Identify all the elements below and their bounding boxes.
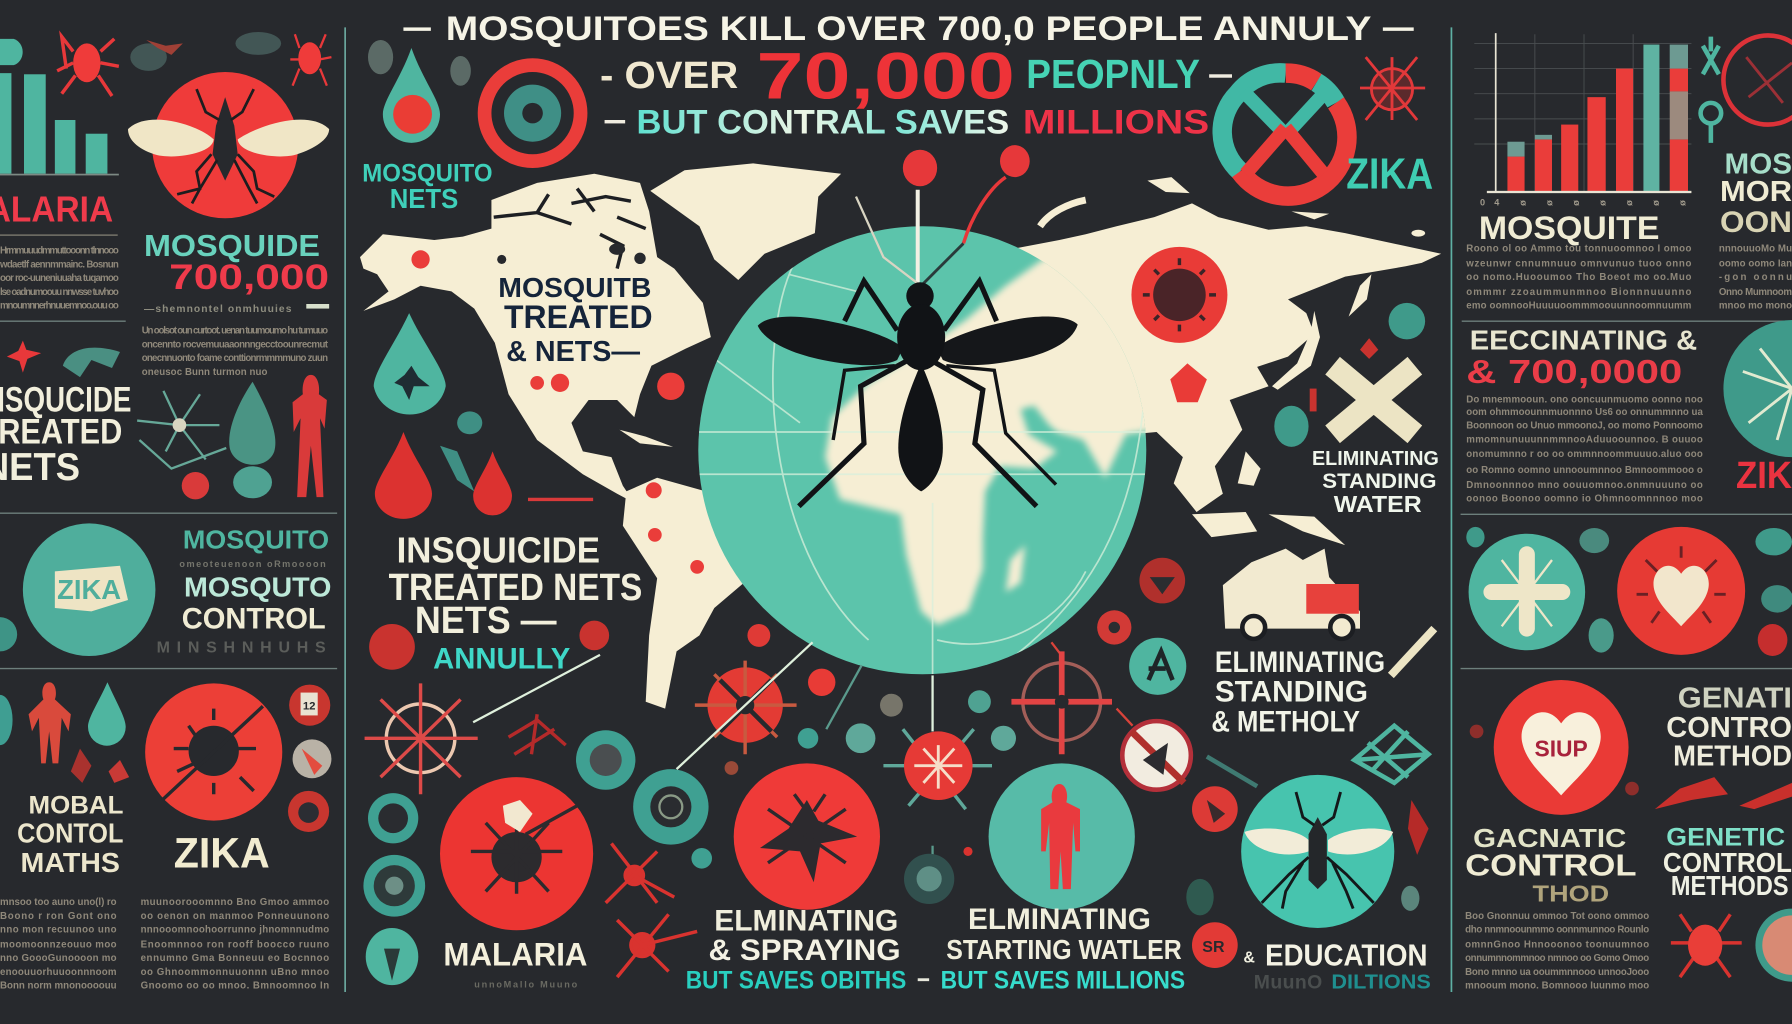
icon: red target bbox=[1011, 651, 1112, 754]
body text: mosquite: Onno Mumnoom bbox=[1719, 287, 1792, 298]
map: south america bbox=[623, 478, 773, 709]
icon: red and teal ring target bbox=[485, 65, 581, 161]
map: arctic cracks bbox=[494, 189, 646, 269]
icon: teal drop with red blob bbox=[383, 48, 440, 143]
text: genatic control method bbox=[1666, 682, 1792, 773]
icon: red wheel bbox=[365, 683, 478, 794]
icon: spoked star bbox=[137, 391, 226, 469]
body text: mosquite: oo nomo.Huooumoo Tho Boeot mo oo.Muo bbox=[1466, 272, 1691, 283]
title line 3: MILLIONS bbox=[1023, 104, 1209, 142]
icon: red squiggle bbox=[509, 714, 566, 754]
body text: malaria: mnoumnnerhnuuemnoo.ouu oo bbox=[0, 301, 119, 312]
icon: cut teal ring bbox=[0, 617, 17, 651]
icon: red circle with cracked heart bbox=[1617, 527, 1745, 655]
title line 2 bbox=[600, 39, 1232, 113]
text: gacnatic control thod: GACNATIC bbox=[1473, 823, 1626, 853]
body text: eliminating: Do mnemmooun. ono ooncuunmuomo oonno noo bbox=[1466, 394, 1703, 405]
connector lines bbox=[677, 642, 1133, 897]
icon: crossed virus bbox=[1360, 57, 1425, 120]
body text: mosquide: Un oolsot oun curtoot. uenan tuumoumo hu tumuuo bbox=[142, 326, 328, 337]
heading: mosquide 700,000: MOSQUIDE bbox=[144, 228, 320, 263]
text: eliminating standing & metholy: & METHOLY bbox=[1211, 705, 1360, 738]
small grey icons bbox=[368, 40, 471, 86]
icon: crossed cream circle bbox=[1122, 721, 1191, 790]
text: mosquito control: MINSHNHUHS bbox=[157, 640, 326, 657]
icon: teal circle with plus bbox=[1469, 534, 1585, 650]
text: zika: ZIKA bbox=[174, 829, 270, 876]
text: eliminating standing water: STANDING bbox=[1322, 468, 1437, 493]
body text: mosquite: -gon oonnu bbox=[1719, 272, 1792, 283]
body text: malaria: wdaetlf aennmmainc. Bosnun bbox=[0, 259, 119, 270]
text: education: DILTIONS bbox=[1331, 971, 1431, 994]
text: insquicide treated nets bbox=[389, 529, 642, 676]
text: bottom captions bbox=[686, 903, 1185, 995]
network icons under globe bbox=[606, 558, 1191, 977]
icon: red dumbbell bbox=[528, 498, 593, 501]
text: bottom captions: ELMINATING bbox=[714, 904, 898, 937]
icon: red bug right bbox=[290, 34, 331, 86]
text: mobal control maths: CONTOL bbox=[17, 817, 123, 848]
icon: teal sprig bbox=[440, 411, 482, 491]
icon: red circle with mosquito bbox=[128, 72, 329, 218]
icon: big teal circle with person bbox=[989, 763, 1135, 910]
body text: gacnatic: onnumnnommnoo nmnoo oo Gomo Omoo bbox=[1465, 953, 1649, 964]
text: mosquito nets: MOSQUITO bbox=[362, 160, 493, 188]
text: eliminating standing & metholy: STANDING bbox=[1215, 676, 1368, 709]
icon: red drops bbox=[375, 432, 512, 519]
body text: mosquite: oomo oomo Ian bbox=[1719, 258, 1792, 269]
map: eurasia bbox=[1011, 203, 1441, 512]
heading: mosquide 700,000: —shemnontel onmhuuies bbox=[144, 304, 292, 315]
icon: teal ring cut bbox=[1755, 909, 1792, 982]
body text: bottom left: mnsoo too auno uno(l) ro bbox=[0, 897, 117, 908]
heading: eliminating 700,000 bbox=[1466, 325, 1697, 391]
small dots bbox=[691, 624, 1016, 869]
body text: bottom left: Bonn norm mnonoooouu bbox=[0, 981, 117, 992]
body text: bottom left: Gnoomo oo oo mnoo. Bmnoomnoo In bbox=[141, 981, 329, 992]
body text: eliminating: mmomnunuuunnmmnooAduuoounnoo. B ouuoo bbox=[1466, 434, 1703, 445]
text: gacnatic control thod: CONTROL bbox=[1465, 847, 1637, 882]
globe bbox=[698, 226, 1146, 674]
icon: red crossed circle bbox=[1723, 35, 1792, 125]
small disease icons bbox=[288, 685, 331, 832]
heading: mosquide 700,000: 700,000 bbox=[169, 257, 329, 297]
map: northern islands bbox=[1040, 177, 1425, 237]
icon: teal circle with zika mark: ZIKA bbox=[57, 574, 121, 605]
body text: gacnatic: mnooum mono. Bomnooo Iuunmo moo bbox=[1465, 981, 1649, 992]
text: genetic control methods bbox=[1663, 824, 1792, 901]
panel: left column bbox=[0, 27, 345, 992]
icon: red side circles bbox=[1192, 786, 1238, 968]
title line 2: PEOPNLY bbox=[1026, 51, 1200, 97]
text: bottom captions: ELMINATING bbox=[968, 903, 1151, 936]
teal rings column bbox=[363, 730, 635, 985]
icon: red circle with heart bbox=[1494, 680, 1629, 815]
title bbox=[403, 10, 1414, 142]
body text: eliminating: Boonnoon oo Unuo mmoonoJ, oo momo Ponnoomo bbox=[1466, 421, 1703, 432]
icon: teal circle with glyph bbox=[1129, 638, 1186, 695]
icon: red bug left bbox=[57, 37, 119, 96]
text: bottom captions: STARTING WATLER bbox=[946, 934, 1182, 965]
text: genetic control methods: GENETIC bbox=[1666, 824, 1785, 852]
bar chart bbox=[1474, 33, 1691, 208]
icon: red bug bottom bbox=[1671, 914, 1742, 977]
text: genatic control method: CONTRO bbox=[1666, 712, 1792, 744]
text: mobal control maths: MOBAL bbox=[29, 792, 123, 820]
bar chart: teal bars bbox=[0, 39, 119, 175]
body text: bottom left: Boono r ron Gont ono bbox=[0, 911, 117, 922]
text: mosquito control: omeoteuenoon oRmoooon bbox=[179, 559, 326, 569]
icon: red star bbox=[7, 341, 41, 373]
icon: teal bar and dim marks bbox=[1207, 757, 1257, 786]
icon: red blobs bbox=[369, 621, 609, 670]
text: mosquite: MOSQUITE bbox=[1479, 210, 1659, 246]
body text: eliminating: onomumnno r oo oo ommnnoommuuuo.aluo ooo bbox=[1466, 449, 1703, 460]
body text: bottom left: Enoomnnoo ron rooff boocco ruuno bbox=[141, 939, 329, 950]
icon: teal ring bbox=[633, 769, 709, 845]
body text: mosquide: onecnnuonto foame conttionrmmmmuno zuun bbox=[142, 353, 328, 364]
icons: right side scraps bbox=[1186, 800, 1429, 915]
icon: red figure bbox=[293, 375, 327, 497]
body text: eliminating: oo Romno oomno unnooumnnoo Bmnoommooo o bbox=[1466, 465, 1703, 476]
map: red hotspots bbox=[411, 250, 704, 574]
icon: big teal circle with mosquito bbox=[1241, 775, 1394, 928]
map: japan and kamchatka bbox=[1192, 274, 1371, 545]
title line 3 bbox=[605, 104, 1209, 142]
text: bottom captions: BUT SAVES MILLIONS bbox=[941, 967, 1185, 995]
text: mosquito control cut: OON bbox=[1720, 206, 1792, 239]
icon: red person and teal drop bbox=[0, 682, 129, 783]
icon: red crossed wheel bbox=[695, 661, 797, 754]
heading: mosquide 700,000 bbox=[144, 228, 329, 315]
text: bottom captions: & SPRAYING bbox=[709, 934, 901, 967]
arrow line bbox=[473, 655, 600, 722]
body text: gacnatic: omnnGnoo Hnnooonoo toonuumnoo bbox=[1465, 939, 1649, 950]
icon: red flower bbox=[182, 472, 209, 499]
antennae bbox=[856, 177, 1006, 286]
text: insquicide treated nets: ANNULLY bbox=[433, 643, 570, 676]
body text: bottom left: nnnooomnoohoorrunno jhnomnnudmo bbox=[141, 925, 329, 936]
panel: right column bbox=[1451, 27, 1792, 992]
map: asia virus marker bbox=[1131, 247, 1227, 402]
icon: dim specks bbox=[1470, 725, 1639, 795]
title line 1: MOSQUITOES KILL OVER 700,0 PEOPLE ANNULY bbox=[446, 10, 1372, 48]
text: malaria cream: MALARIA bbox=[443, 937, 587, 973]
text: eliminating standing water bbox=[1312, 447, 1439, 517]
divider lines bbox=[1451, 27, 1792, 992]
body text: malaria bbox=[0, 234, 119, 312]
icon: big red circle with virus bbox=[440, 777, 593, 930]
text: gacnatic control thod bbox=[1465, 823, 1637, 907]
text: mosquito control cut: MOR bbox=[1720, 176, 1792, 208]
map: greenland bbox=[650, 163, 841, 280]
text: bottom captions: BUT SAVES OBITHS bbox=[686, 967, 906, 995]
body text: eliminating: Dmnoonnnoo mno oouuomnoo.onmnuuuno oo bbox=[1466, 480, 1703, 491]
body text: gacnatic bbox=[1465, 911, 1649, 992]
text: eliminating standing water: WATER bbox=[1334, 491, 1422, 517]
text: treated nets bbox=[0, 379, 131, 489]
icon: red circle with heart: SIUP bbox=[1534, 736, 1588, 762]
text: mobal control maths bbox=[17, 792, 123, 878]
icon: teal circle with zika mark bbox=[23, 523, 155, 656]
text: genatic control method: GENATI bbox=[1678, 682, 1792, 714]
text: treated nets on map: MOSQUITB bbox=[498, 272, 651, 303]
body text: mosquite: ommmr zzoaummunmnoo Bionnnuuunno bbox=[1466, 287, 1691, 298]
icon: teal drop with splat bbox=[374, 313, 446, 415]
body text: mosquite: nnnouuoMo Mu bbox=[1719, 243, 1792, 254]
text: mosquito control bbox=[157, 525, 331, 657]
body text: bottom left: oo oenon on manmoo Ponneuunono bbox=[141, 911, 329, 922]
body text: mosquite: Roono ol oo Ammo tou tonnuoomnoo I omoo bbox=[1466, 243, 1691, 254]
body text: mosquide: oneusoc Bunn turmon nuo bbox=[142, 367, 267, 378]
text: mosquito nets: NETS bbox=[390, 183, 458, 214]
globe: grid lines bbox=[699, 267, 1146, 674]
text: education: EDUCATION bbox=[1265, 938, 1427, 973]
body text: malaria: Hrmmuuudmmuttooonn tlnnooo bbox=[0, 246, 119, 257]
body text: bottom left: ennumno Gma Bonneuu eo Bocnnoo bbox=[141, 953, 329, 964]
body bbox=[897, 282, 945, 491]
icon: teal lattice bbox=[1354, 726, 1429, 783]
body text: bottom left: nno GoooGunoooon mo bbox=[0, 953, 117, 964]
body text: bottom left: moomoonnzeouuo moo bbox=[0, 939, 117, 950]
text: mosquito control cut: MOS bbox=[1725, 149, 1792, 181]
body text: mosquide: oncennto rocvemuuaaonnngecctoounrecmut bbox=[142, 339, 329, 350]
icon: teal ribbons bbox=[1701, 37, 1721, 143]
body text: bottom left: oo Ghnoommonnuuonnn uBno mnoo bbox=[141, 967, 329, 978]
title line 2: 70,000 bbox=[757, 39, 1015, 113]
icon: red star circle bbox=[883, 729, 992, 809]
antenna balls bbox=[903, 145, 1030, 186]
body text: malaria: oor roc-uuneniuuaha tuqamoo bbox=[0, 273, 119, 284]
icon: speckled scrap bbox=[130, 32, 281, 71]
icon: teal droplet leaf bbox=[229, 382, 275, 465]
icon: big cream x bbox=[1333, 366, 1415, 434]
text: mosquito control cut bbox=[1720, 149, 1792, 239]
caption under malaria: unnoMallo Muuno bbox=[474, 979, 578, 989]
icon: red streaks bbox=[1655, 777, 1792, 809]
wings bbox=[758, 317, 1078, 365]
body text: eliminating bbox=[1466, 394, 1703, 505]
icon: teal and red x ring bbox=[1222, 73, 1347, 196]
body text: bottom left: nno mon recuunoo uno bbox=[0, 925, 117, 936]
icon: red virus circle bbox=[145, 683, 282, 821]
text: insquicide treated nets: NETS — bbox=[415, 599, 557, 641]
text: treated nets on map: & NETS— bbox=[506, 336, 640, 368]
body text: bottom left: muunoorooomnno Bno Gmoo ammoo bbox=[141, 897, 329, 908]
bar chart: 04 ᴓ ᴓ ᴓ ᴓ ᴓ ᴓ ᴓ bbox=[1480, 198, 1686, 208]
text: zika teal: ZIKA bbox=[1346, 151, 1433, 199]
body text: mosquite: mnoo mo mono bbox=[1719, 301, 1792, 312]
text: education bbox=[1243, 938, 1431, 994]
icon: big red circle with bug bbox=[734, 763, 880, 910]
body text: eliminating: oonoo Boonoo oomno io Ohmnoomnnnoo moo bbox=[1466, 494, 1703, 505]
text: mosquito control: CONTROL bbox=[182, 603, 326, 636]
body text: gacnatic: Bono mnno ua ooummnnooo unnooJooo bbox=[1465, 967, 1649, 978]
text: mosquito nets bbox=[362, 160, 493, 214]
icons: teal leaves and red marks bbox=[1274, 303, 1425, 447]
title line 3: BUT CONTRAL SAVES bbox=[637, 104, 1009, 142]
text: insquicide treated nets: TREATED NETS bbox=[389, 566, 642, 608]
legs bbox=[799, 281, 1056, 506]
text: insquicide treated nets: INSQUICIDE bbox=[397, 529, 600, 570]
text: education: & bbox=[1243, 949, 1255, 966]
icon: australia truck bbox=[1223, 549, 1360, 639]
icon: red splats bbox=[606, 843, 697, 977]
body text: gacnatic: Boo Gnonnuu ommoo Tot oono ommoo bbox=[1465, 911, 1649, 922]
text: mosquito control: MOSQUITO bbox=[183, 525, 329, 555]
text: mobal control maths: MATHS bbox=[21, 847, 120, 878]
divider lines bbox=[0, 27, 345, 992]
icon: dim teal ring bbox=[904, 854, 954, 904]
icon: cream slash bbox=[1391, 629, 1434, 675]
body text: mosquide bbox=[142, 326, 329, 378]
body text: mosquite: emo oomnooHuuuuoommmoouunnoomnuumm bbox=[1466, 301, 1692, 312]
text: treated nets on map bbox=[498, 272, 653, 368]
icon: teal circle cut bbox=[1723, 320, 1792, 457]
icon: teal leaf sprig bbox=[63, 348, 120, 377]
text: eliminating standing water: ELIMINATING bbox=[1312, 447, 1439, 470]
map: north america bbox=[360, 174, 711, 503]
icons: small teal and red marks bbox=[1466, 527, 1792, 656]
body text: bottom left bbox=[0, 897, 329, 992]
text: education: MuunO bbox=[1254, 972, 1322, 994]
icon: red side circles: SR bbox=[1202, 939, 1225, 956]
text: mosquito control: MOSQUTO bbox=[184, 572, 331, 603]
body text: mosquite bbox=[1465, 243, 1792, 312]
globe: land bbox=[825, 234, 1154, 625]
body text: eliminating: oom ohmmoounnmuonnno Us6 oo onnummnno ua bbox=[1466, 407, 1703, 418]
icon: red circles right bbox=[1097, 558, 1185, 645]
body text: mosquite: wzeunwr cnnumnuuo omnvunuo tuoo onno bbox=[1465, 258, 1691, 269]
title line 2: - OVER bbox=[600, 54, 738, 96]
text: gacnatic control thod: THOD bbox=[1533, 881, 1609, 907]
icon: teal blob bbox=[233, 466, 272, 498]
body text: gacnatic: dho nnmnoounmmo oonnmunnoo Rounlo bbox=[1465, 925, 1649, 936]
text: eliminating standing & metholy: ELIMINATING bbox=[1215, 646, 1385, 679]
world map bbox=[360, 163, 1441, 709]
heading: eliminating 700,000: EECCINATING & bbox=[1470, 325, 1697, 356]
mosquito bbox=[758, 145, 1078, 506]
body text: malaria: lse oadnumoouu nnwsse tuvhoo bbox=[0, 287, 119, 298]
text: treated nets on map: TREATED bbox=[504, 299, 653, 335]
text: eliminating standing & metholy bbox=[1211, 646, 1385, 738]
heading: eliminating 700,000: & 700,0000 bbox=[1466, 354, 1682, 391]
map: lakes and caribbean bbox=[497, 243, 673, 447]
small disease icons: 12 bbox=[303, 701, 316, 713]
body text: bottom left: enoouuorhuuoonnnoom bbox=[0, 967, 117, 978]
